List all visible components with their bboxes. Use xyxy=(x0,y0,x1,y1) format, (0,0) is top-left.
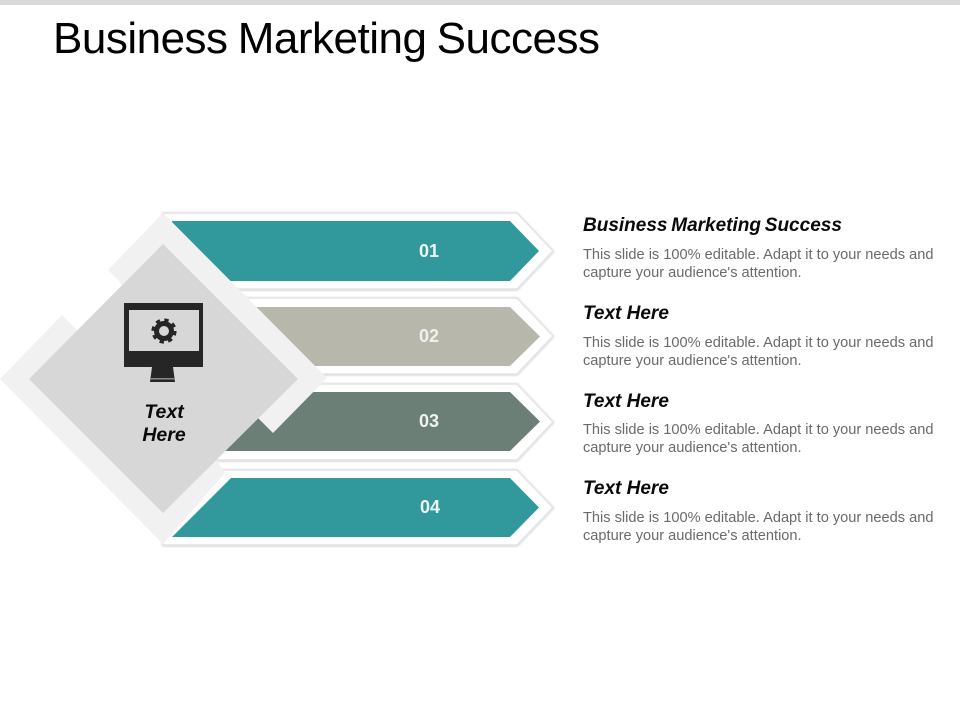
icon: gear xyxy=(153,320,175,342)
heading 3: Text Here xyxy=(583,391,669,412)
diamond label: Text xyxy=(144,401,184,423)
text block 2: capture your audience's attention. xyxy=(583,353,802,369)
diamond xyxy=(0,213,327,544)
number 01: 01 xyxy=(419,241,439,261)
arrow 1 xyxy=(163,213,553,289)
text block 3: This slide is 100% editable. Adapt it to your needs and xyxy=(583,422,933,438)
text block 4 xyxy=(583,510,933,544)
text block 2 xyxy=(583,335,933,369)
title: Business Marketing Success xyxy=(53,14,599,63)
icon: monitor with gear xyxy=(124,303,203,382)
diamond outer ring xyxy=(108,213,327,433)
arrow 4 xyxy=(163,470,553,545)
text block 4: capture your audience's attention. xyxy=(583,528,802,544)
top bar xyxy=(0,0,960,5)
arrow numbers xyxy=(419,241,440,517)
heading 1: Business Marketing Success xyxy=(583,215,842,236)
arrow 3 xyxy=(163,384,553,460)
number 02: 02 xyxy=(419,326,439,346)
text block 2: This slide is 100% editable. Adapt it to your needs and xyxy=(583,335,933,351)
diamond label xyxy=(142,401,186,446)
heading 4: Text Here xyxy=(583,478,669,499)
number 03: 03 xyxy=(419,411,439,431)
text block 1: This slide is 100% editable. Adapt it to your needs and xyxy=(583,247,933,263)
arrow 2 xyxy=(163,298,553,374)
heading 2: Text Here xyxy=(583,303,669,324)
diamond inner xyxy=(29,244,298,513)
text block 3 xyxy=(583,422,933,456)
text block 1 xyxy=(583,247,933,281)
diamond label: Here xyxy=(142,424,186,446)
text block 3: capture your audience's attention. xyxy=(583,440,802,456)
number 04: 04 xyxy=(420,497,440,517)
text block 4: This slide is 100% editable. Adapt it to your needs and xyxy=(583,510,933,526)
text block 1: capture your audience's attention. xyxy=(583,265,802,281)
